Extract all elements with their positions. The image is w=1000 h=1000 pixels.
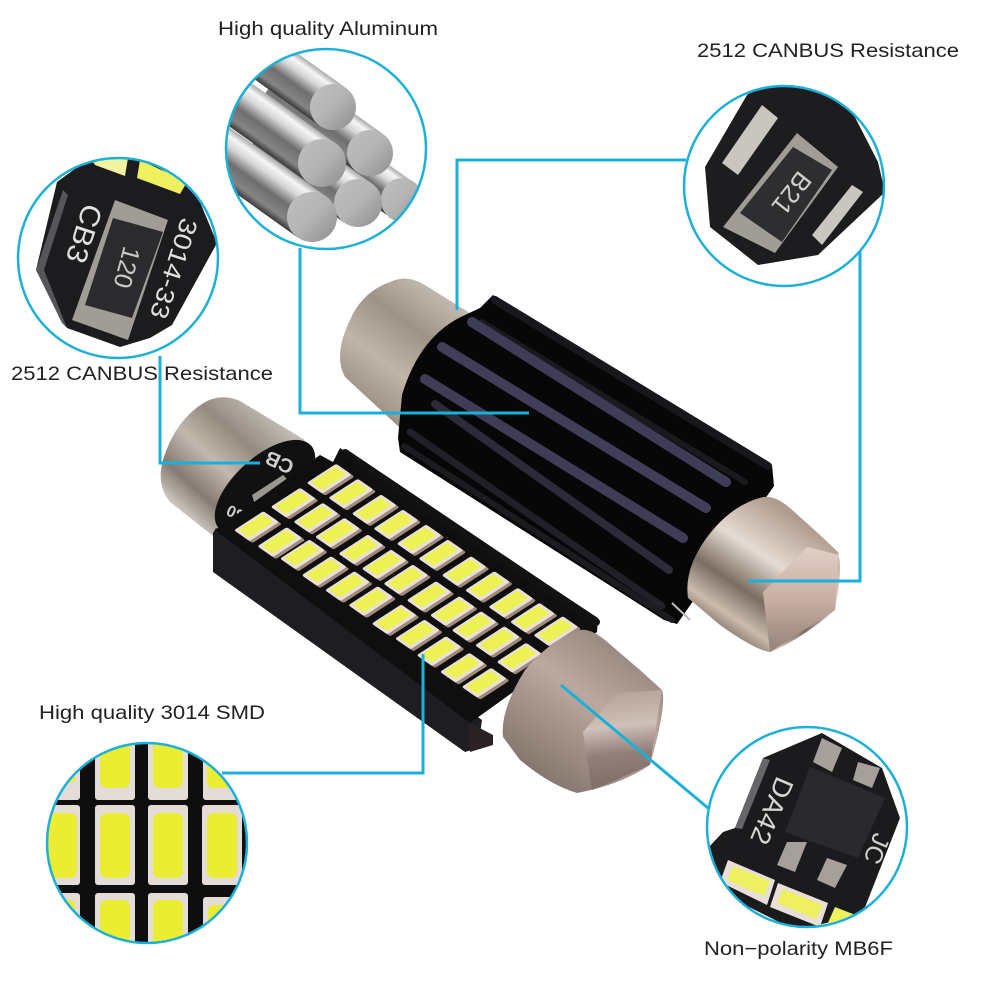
LED chip array [234,464,581,700]
top rib of board [345,453,596,622]
callout circle: left 2512 CANBUS resistance: 3014-33 [144,215,203,322]
callout circle: 3014 SMD close-up [46,742,248,944]
label: non-polarity MB6F: Non−polarity MB6F [704,938,893,960]
connector line: left CANBUS resistance [160,356,260,463]
wire pin [672,603,690,620]
cap end print CB: CB [262,446,297,478]
label: high quality 3014 SMD: High quality 3014 SMD [39,702,265,724]
callout circle: left 2512 CANBUS resistance [18,150,218,358]
callout circle: top 2512 CANBUS resistance: B21 [766,166,818,221]
right cap cone tip [583,690,662,790]
callout circle: top 2512 CANBUS resistance [684,80,885,286]
callout circle: left 2512 CANBUS resistance: 120 [107,244,145,291]
LED festoon bulb [161,397,663,793]
board top face [215,448,598,723]
right metal cap [687,497,840,652]
connector line: top CANBUS resistance to left cap [457,160,686,310]
connector line: aluminum [300,248,529,413]
label: top 2512 CANBUS resistance: 2512 CANBUS Resistance [697,40,959,62]
black cap end face [199,423,331,551]
heatsink ribs [404,300,768,620]
right cap cone tip [763,547,839,652]
callout circle: aluminum rods [224,48,428,250]
left metal cap [340,279,473,428]
callout circle: left 2512 CANBUS resistance: CB3 [59,200,108,267]
callout circle: non-polarity MB6F: JC [857,829,895,868]
label: left 2512 CANBUS resistance: 2512 CANBUS Resistance [11,363,273,385]
resistor on cap end [252,475,288,505]
left metal cap [161,397,305,536]
heatsink festoon bulb [340,279,840,652]
right metal cap [503,630,663,793]
black aluminium heatsink body [398,295,774,624]
connector line: top CANBUS resistance to right cap [748,250,860,581]
cap end print 30: 30 [224,501,248,524]
board side face [213,528,482,752]
callout circle: non-polarity MB6F [707,727,907,935]
connector line: SMD [222,654,423,773]
board end tab [468,722,493,752]
connector line: MB6F [561,685,708,808]
label: high quality aluminum: High quality Aluminum [218,18,438,40]
callout circle: non-polarity MB6F: DA42 [744,773,799,849]
